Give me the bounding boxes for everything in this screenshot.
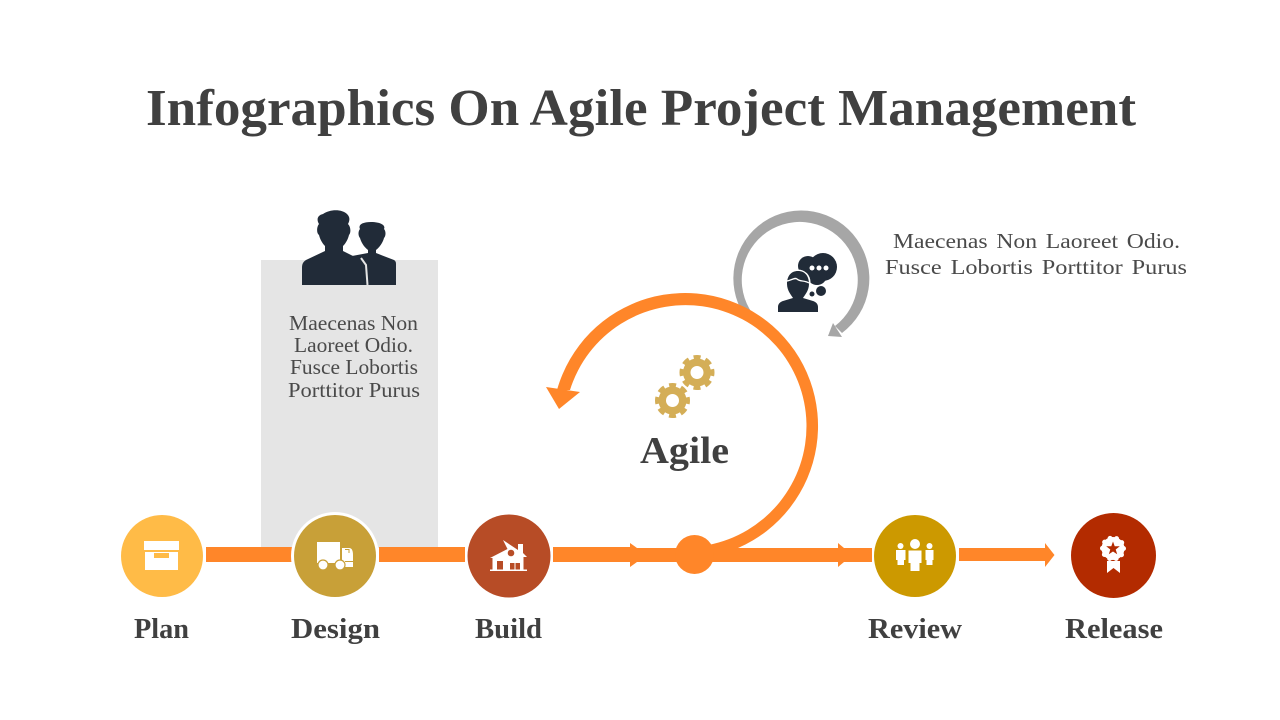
arrow: orange agile loop (546, 293, 818, 574)
step: Review (868, 513, 962, 645)
label: Design: Design (291, 613, 380, 645)
label: Plan: Plan (134, 613, 189, 645)
timeline bars and arrows (206, 543, 1054, 567)
label: Release: Release (1065, 613, 1163, 645)
text: speech copy (885, 229, 1187, 279)
text: panel copy: Fusce Lobortis (290, 355, 418, 379)
label: Agile: Agile (640, 430, 729, 472)
text: panel copy: Porttitor Purus (288, 378, 420, 402)
text: speech copy: Fusce Lobortis Porttitor Purus (885, 255, 1187, 279)
step: Build (466, 513, 552, 645)
arrow: grey loop (733, 210, 869, 337)
text: speech copy: Maecenas Non Laoreet Odio. (893, 229, 1180, 253)
title: Infographics On Agile Project Management (146, 80, 1137, 137)
icon: gears (657, 357, 712, 416)
icon: truck (317, 542, 353, 570)
label: Build: Build (475, 613, 542, 645)
icon: group of people (896, 539, 934, 571)
icon: box (144, 541, 179, 570)
panel: team (261, 210, 438, 548)
icon: person with speech bubble (778, 253, 837, 312)
step: Design (291, 512, 380, 645)
step: Plan (121, 515, 203, 645)
icon: two people (302, 210, 396, 285)
icon: house (490, 540, 527, 571)
icon: award rosette (1102, 537, 1124, 573)
text: panel copy: Laoreet Odio. (294, 333, 413, 357)
text: panel copy (288, 311, 420, 402)
label: Review: Review (868, 613, 962, 645)
step: Release (1065, 513, 1163, 645)
text: panel copy: Maecenas Non (289, 311, 419, 335)
